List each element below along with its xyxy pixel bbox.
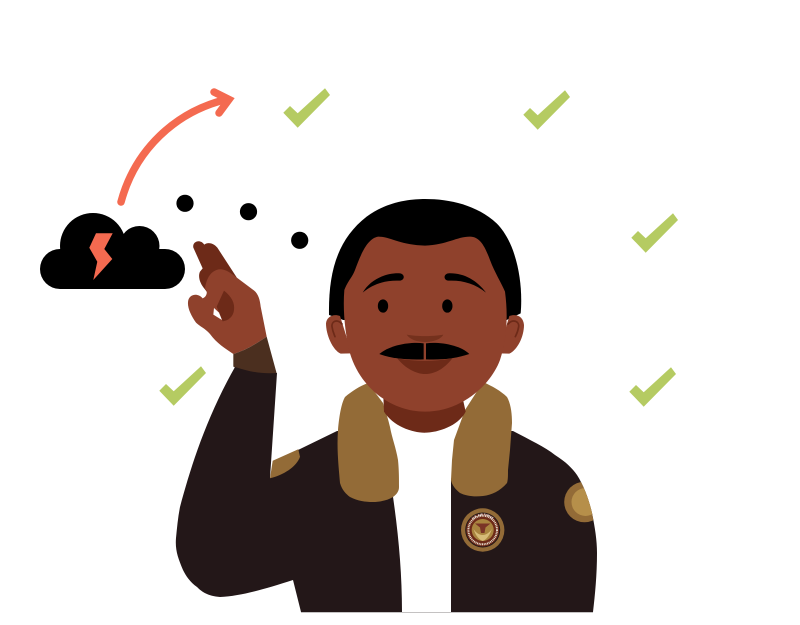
mustache bbox=[379, 343, 469, 359]
badge text: U.S. AIR FORCE bbox=[472, 514, 494, 520]
hand: raised pointing fingers and cuff bbox=[188, 241, 277, 374]
jacket: dark body and raised sleeve bbox=[176, 367, 597, 612]
face bbox=[344, 237, 507, 412]
head: neck, ears, hair, face bbox=[326, 199, 524, 433]
illustration: man in flight jacket pointing at a storm cloud bbox=[40, 88, 678, 613]
collar: right fur bbox=[451, 382, 512, 496]
collar: left fur bbox=[338, 383, 399, 502]
neck bbox=[383, 397, 466, 433]
dots: thought trail bbox=[176, 195, 308, 249]
patch: shoulder emblem bbox=[564, 482, 594, 522]
arrow: curved upward from cloud bbox=[121, 92, 229, 202]
right ear bbox=[498, 315, 524, 354]
patch: collar lining under sleeve bbox=[270, 449, 300, 478]
icon: check mark 2 bbox=[523, 90, 570, 130]
mouth bbox=[397, 358, 452, 374]
ear details bbox=[332, 321, 519, 337]
icon: check mark 3 bbox=[631, 213, 678, 253]
icon: check mark 1 bbox=[283, 88, 330, 128]
icon: storm cloud with lightning bolt bbox=[40, 213, 185, 289]
icon: check mark 4 bbox=[629, 367, 676, 407]
nose bbox=[407, 335, 443, 342]
line: bottom edge bbox=[301, 612, 593, 613]
left ear bbox=[326, 315, 352, 354]
hair bbox=[329, 199, 521, 320]
eyes bbox=[378, 299, 452, 313]
eyebrows bbox=[363, 273, 486, 293]
patch: chest badge bbox=[461, 508, 504, 552]
white shirt bbox=[385, 415, 465, 612]
icon: check mark 5 bbox=[159, 366, 206, 406]
